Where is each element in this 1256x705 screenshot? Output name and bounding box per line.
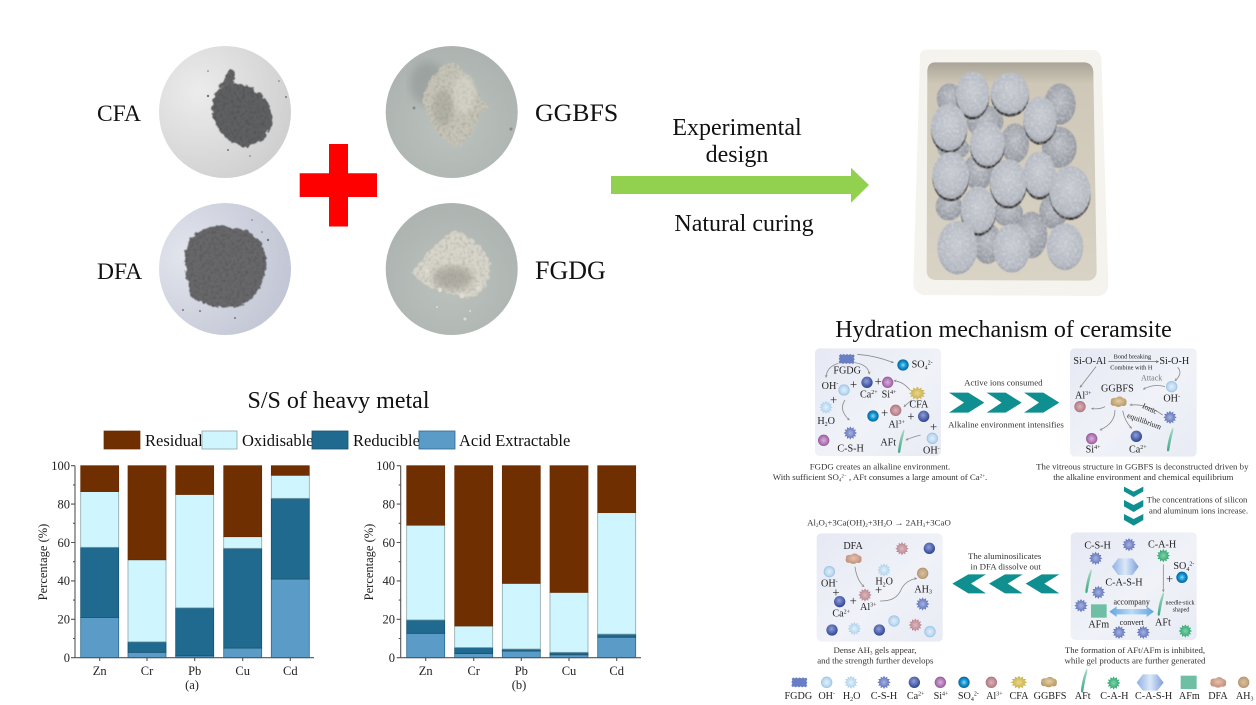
panel: DFA dense gels: OH xyxy=(821,579,836,590)
photo: ceramsite in crucible xyxy=(913,49,1108,296)
legend: species: CFA xyxy=(1009,691,1029,702)
text: FGDG caption line 2: 2− xyxy=(841,474,847,479)
panel: FGDG alkaline environment: 4 xyxy=(925,366,928,372)
panel: FGDG alkaline environment: + xyxy=(907,409,914,423)
chart: (b) stacked bars: 20 xyxy=(382,612,395,626)
panel: gel products: C-A-H xyxy=(1148,540,1177,551)
text: gel caption: The formation of AFt/AFm is inhibited, xyxy=(1065,645,1205,655)
legend: chart fractions: Reducible xyxy=(353,431,420,450)
panel: DFA dense gels: + xyxy=(850,594,857,608)
text: reaction formula: +3Ca(OH) xyxy=(827,518,865,528)
chart: (a) stacked bars: 0 xyxy=(64,651,70,665)
chart: (b) stacked bars: 0 xyxy=(389,651,395,665)
text: design: design xyxy=(706,142,768,168)
panel: FGDG alkaline environment: 2- xyxy=(928,360,933,366)
panel: FGDG alkaline environment: H xyxy=(817,416,825,427)
text: DFA caption line 2: and the strength further develops xyxy=(817,656,934,666)
text: alkaline environment intensifies: Alkaline environment intensifies xyxy=(948,419,1064,429)
legend: species: C-S-H xyxy=(871,691,898,702)
text: reaction formula: 3 xyxy=(825,524,828,529)
chart: (b) stacked bars: Cr xyxy=(467,664,481,678)
legend: chart fractions: Acid Extractable xyxy=(459,431,570,450)
legend: chart fractions xyxy=(104,431,570,450)
panel: GGBFS deconstruction: Si xyxy=(1086,444,1094,455)
panel: FGDG alkaline environment: O xyxy=(828,416,835,427)
text: reaction formula: O xyxy=(818,518,825,528)
panel: FGDG alkaline environment: 4+ xyxy=(890,390,897,396)
text: gel caption line 2: while gel products are further generated xyxy=(1065,656,1206,666)
legend: species: 2+ xyxy=(918,692,925,698)
panel: FGDG alkaline environment: AFt xyxy=(880,438,896,449)
panel: FGDG alkaline environment: + xyxy=(830,393,837,407)
label: GGBFS: GGBFS xyxy=(535,98,618,127)
panel: gel products: SO xyxy=(1173,561,1186,572)
panel: FGDG alkaline environment: OH xyxy=(822,381,836,392)
text: reaction formula: 2 xyxy=(816,524,819,529)
label: DFA: DFA xyxy=(97,259,142,285)
legend: species: 2 xyxy=(850,697,853,703)
panel: FGDG alkaline environment: 2+ xyxy=(871,390,878,396)
text: FGDG caption line 2: . xyxy=(985,472,987,482)
panel: FGDG alkaline environment: - xyxy=(938,446,940,452)
panel: FGDG alkaline environment: 3+ xyxy=(898,420,905,426)
photo: GGBFS powder xyxy=(386,46,518,178)
panel: FGDG alkaline environment: + xyxy=(850,378,857,392)
panel: GGBFS deconstruction: Si-O-H xyxy=(1159,356,1190,367)
legend: species: Ca xyxy=(907,691,918,702)
panel: GGBFS deconstruction: Ionic xyxy=(1141,401,1159,416)
chart: (b) stacked bars xyxy=(362,459,641,692)
panel: FGDG alkaline environment: SO xyxy=(912,360,925,371)
panel: GGBFS deconstruction: Combine with H xyxy=(1110,364,1153,371)
text: reaction formula: 2 xyxy=(883,524,886,529)
panel: FGDG alkaline environment: C-S-H xyxy=(837,444,865,455)
panel: FGDG alkaline environment: Ca xyxy=(860,389,871,400)
panel: FGDG alkaline environment: OH xyxy=(923,445,938,456)
arrow: process xyxy=(611,168,869,203)
text: reaction formula: +3H xyxy=(868,518,884,528)
legend: species: 2- xyxy=(974,692,979,698)
panel: gel products: C-A-S-H xyxy=(1105,578,1143,589)
panel: FGDG alkaline environment: FGDG xyxy=(833,365,862,376)
panel: DFA dense gels: - xyxy=(836,579,838,585)
panel: FGDG alkaline environment: Al xyxy=(888,419,898,430)
text: experimental design: Experimental xyxy=(672,115,802,141)
panel: gel products: shaped xyxy=(1173,608,1189,614)
panel: FGDG alkaline environment: Si xyxy=(882,389,890,400)
panel: FGDG alkaline environment: 2 xyxy=(825,422,828,428)
panel: FGDG alkaline environment: + xyxy=(881,406,888,420)
heading: S/S of heavy metal: S/S of heavy metal xyxy=(248,388,430,414)
panel: GGBFS deconstruction: GGBFS xyxy=(1101,384,1134,395)
text: DFA caption: Dense AH xyxy=(833,645,870,655)
panel: GGBFS deconstruction: - xyxy=(1178,394,1180,400)
legend: species: C-A-H xyxy=(1100,691,1129,702)
label: CFA: CFA xyxy=(97,101,141,127)
diagram: lower mechanism row xyxy=(785,518,1253,703)
panel: DFA dense gels: + xyxy=(832,585,839,599)
legend: species: AH xyxy=(1236,691,1250,702)
panel: DFA dense gels: 3 xyxy=(929,590,932,596)
chart: (a) stacked bars: Cu xyxy=(235,664,251,678)
text: GGBFS caption line 2: the alkaline environment and chemical equilibrium xyxy=(1053,472,1234,482)
panel: DFA dense gels xyxy=(817,533,943,642)
chart: (a) stacked bars: 100 xyxy=(51,459,70,473)
legend: species: DFA xyxy=(1208,691,1228,702)
panel: DFA dense gels: DFA xyxy=(843,541,864,552)
text: FGDG caption line 2: 4 xyxy=(839,478,842,483)
chart: (b) stacked bars: Pb xyxy=(515,664,528,678)
panel: gel products: 2- xyxy=(1189,562,1194,568)
chart: (a) stacked bars: 80 xyxy=(58,498,70,512)
legend: species: 3+ xyxy=(996,692,1003,698)
chart: (a) stacked bars: (a) xyxy=(185,678,199,692)
chart: (a) stacked bars: Percentage (%) xyxy=(36,524,50,600)
panel: gel products: 4 xyxy=(1186,567,1189,573)
text: FGDG caption line 2: With sufficient SO xyxy=(773,472,839,482)
panel: FGDG alkaline environment xyxy=(815,348,941,456)
chart: (a) stacked bars: Cd xyxy=(283,664,298,678)
panel: gel products: needle-stick xyxy=(1166,600,1194,606)
legend: species: AFt xyxy=(1075,691,1091,702)
legend: species: GGBFS xyxy=(1034,691,1067,702)
chart: (a) stacked bars: 60 xyxy=(58,536,70,550)
panel: DFA dense gels: Ca xyxy=(832,609,844,620)
photo: FGDG powder xyxy=(386,203,518,335)
chart: (a) stacked bars: 40 xyxy=(58,574,70,588)
text: concentrations note line 2: and aluminum ions increase. xyxy=(1149,505,1248,515)
photo: CFA powder xyxy=(159,46,291,178)
panel: DFA dense gels: + xyxy=(875,583,882,597)
text: active ions consumed: Active ions consumed xyxy=(964,378,1043,388)
text: reaction formula: O → 2AH xyxy=(886,518,923,528)
panel: DFA dense gels: Al xyxy=(860,602,870,613)
text: concentrations note: The concentrations of silicon xyxy=(1147,494,1248,504)
arrow: leftward chevrons xyxy=(952,574,1059,593)
text: FGDG caption: FGDG creates an alkaline environment. xyxy=(810,461,950,471)
panel: gel products: AFt xyxy=(1155,618,1171,629)
text: reaction formula: 2 xyxy=(865,524,868,529)
chart: (b) stacked bars: Cu xyxy=(562,664,577,678)
panel: DFA dense gels: O xyxy=(886,576,893,587)
legend: species: 3 xyxy=(1250,696,1253,702)
photo: DFA powder xyxy=(159,203,291,335)
panel: GGBFS deconstruction: Si-O-Al xyxy=(1073,356,1106,367)
chart: (a) stacked bars: Pb xyxy=(188,664,201,678)
label: FGDG: FGDG xyxy=(535,256,606,285)
chart: (b) stacked bars: 100 xyxy=(376,459,395,473)
text: FGDG caption line 2: 2+ xyxy=(980,474,985,479)
chart: (b) stacked bars: Zn xyxy=(419,664,433,678)
legend: species: - xyxy=(833,692,835,698)
panel: GGBFS deconstruction: equilibrium xyxy=(1126,411,1163,431)
chart: (b) stacked bars: (b) xyxy=(512,678,526,692)
legend: species: 4 xyxy=(971,697,974,703)
chart: (a) stacked bars: Cr xyxy=(141,664,154,678)
legend: species: H xyxy=(843,691,850,702)
panel: gel products: AFm xyxy=(1088,619,1109,630)
panel: gel products xyxy=(1071,532,1197,640)
panel: gel products: + xyxy=(1166,572,1173,586)
text: reaction formula: Al xyxy=(807,518,816,528)
panel: GGBFS deconstruction: Attack xyxy=(1141,373,1162,382)
panel: FGDG alkaline environment: + xyxy=(875,375,882,389)
legend: species: FGDG xyxy=(785,691,813,702)
panel: FGDG alkaline environment: CFA xyxy=(909,400,929,411)
legend: chart fractions: Oxidisable xyxy=(242,431,314,450)
panel: GGBFS deconstruction: Al xyxy=(1075,390,1085,401)
panel: GGBFS deconstruction: Bond breaking xyxy=(1114,354,1152,361)
panel: GGBFS deconstruction: OH xyxy=(1163,394,1178,405)
text: natural curing: Natural curing xyxy=(674,211,814,237)
text: aluminosilicates note line 2: in DFA dissolve out xyxy=(971,562,1041,572)
panel: DFA dense gels: H xyxy=(875,576,883,587)
legend: chart fractions: Residual xyxy=(145,431,203,450)
legend: species: OH xyxy=(818,691,833,702)
text: DFA caption: 3 xyxy=(870,651,873,656)
chart: (a) stacked bars xyxy=(36,459,314,692)
panel: DFA dense gels: 2 xyxy=(883,582,886,588)
arrow: active ions chevrons xyxy=(949,393,1059,413)
legend: species: 4+ xyxy=(942,692,949,698)
arrow: downward chevrons xyxy=(1124,487,1143,526)
chart: (b) stacked bars: 60 xyxy=(382,536,395,550)
icon: red plus xyxy=(300,144,377,226)
legend: species: Si xyxy=(934,691,942,702)
legend: species: C-A-S-H xyxy=(1135,691,1173,702)
chart: (a) stacked bars: Zn xyxy=(93,664,107,678)
chart: (a) stacked bars: 20 xyxy=(58,612,70,626)
chart: (b) stacked bars: 80 xyxy=(382,498,395,512)
legend: species: Al xyxy=(986,691,996,702)
text: DFA caption: gels appear, xyxy=(873,645,917,655)
text: FGDG caption line 2: , AFt consumes a large amount of Ca xyxy=(847,472,980,482)
diagram: upper mechanism row xyxy=(773,348,1249,526)
panel: gel products: C-S-H xyxy=(1084,540,1112,551)
legend: species: SO xyxy=(958,691,971,702)
panel: DFA dense gels: 2+ xyxy=(844,609,851,615)
panel: FGDG alkaline environment: + xyxy=(930,420,937,434)
panel: GGBFS deconstruction: 2+ xyxy=(1140,445,1147,451)
panel: DFA dense gels: AH xyxy=(914,584,929,595)
legend: species: O xyxy=(853,691,861,702)
panel: gel products: convert xyxy=(1120,618,1144,627)
chart: (b) stacked bars: 40 xyxy=(382,574,395,588)
text: reaction formula: 3 xyxy=(923,524,926,529)
chart: (b) stacked bars: Cd xyxy=(609,664,625,678)
legend: species: AFm xyxy=(1179,691,1200,702)
panel: gel products: accompany xyxy=(1113,597,1150,606)
panel: FGDG alkaline environment: - xyxy=(836,382,838,388)
panel: GGBFS deconstruction: Ca xyxy=(1129,444,1140,455)
panel: GGBFS deconstruction xyxy=(1070,348,1197,457)
heading: hydration mechanism: Hydration mechanism of ceramsite xyxy=(835,317,1172,343)
text: reaction formula: +3CaO xyxy=(925,518,951,528)
text: aluminosilicates note: The aluminosilicates xyxy=(968,551,1042,561)
panel: GGBFS deconstruction: 4+ xyxy=(1094,445,1101,451)
panel: GGBFS deconstruction: 3+ xyxy=(1085,391,1092,397)
legend: species xyxy=(785,669,1253,703)
chart: (b) stacked bars: Percentage (%) xyxy=(362,524,376,600)
panel: DFA dense gels: 3+ xyxy=(870,603,877,609)
text: GGBFS caption: The vitreous structure in GGBFS is deconstructed driven by xyxy=(1036,461,1249,471)
